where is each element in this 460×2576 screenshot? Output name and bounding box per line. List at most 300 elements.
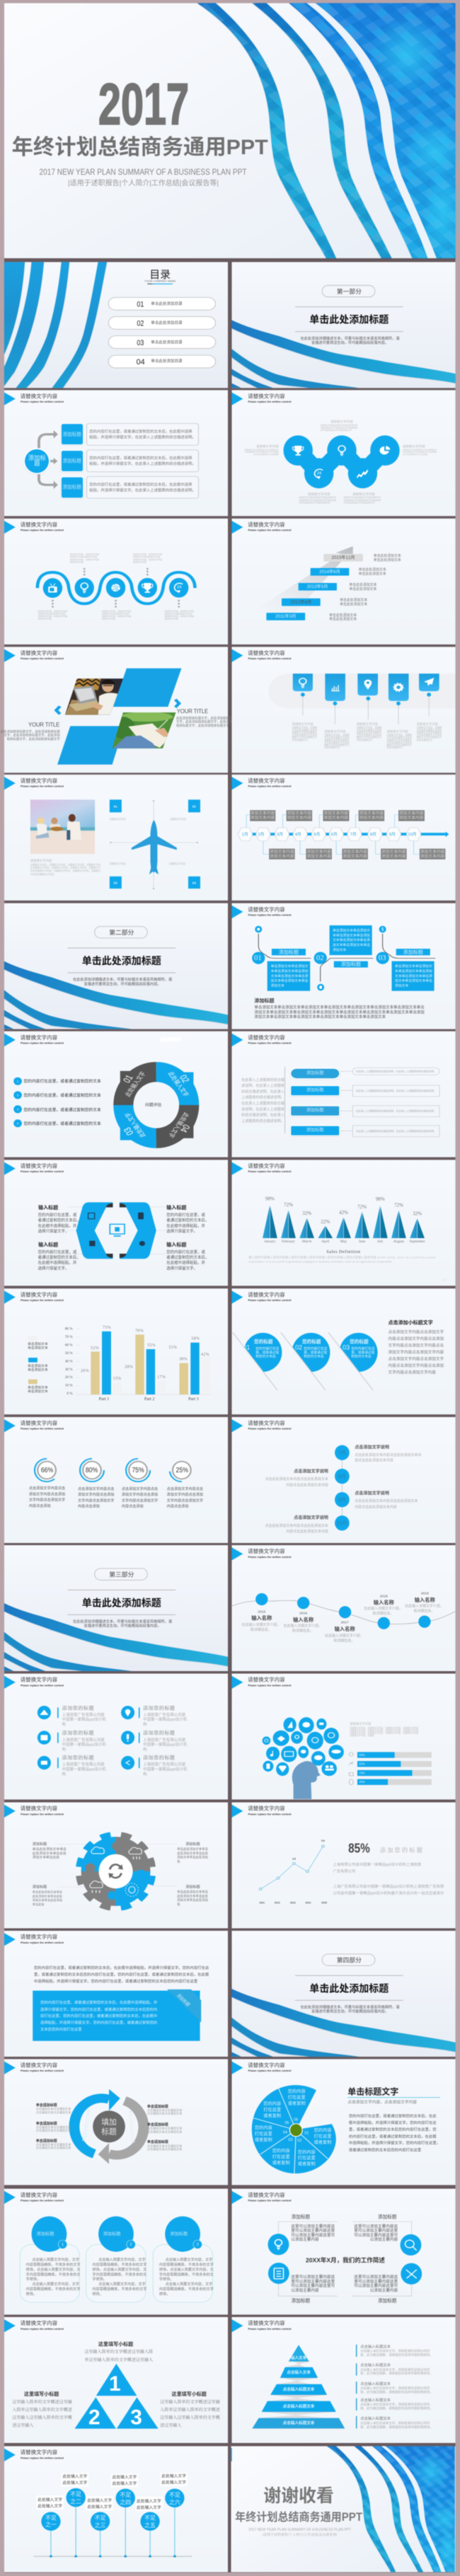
numbered circles: [252, 926, 389, 990]
bottom right text: 在此框中选择粘贴，并: [166, 1260, 205, 1266]
side text: 文字内容点击添加文字内容: [388, 1369, 436, 1375]
top text: 这里输入简单的文字概述这里输入简: [84, 2349, 153, 2355]
white note boxes: 此处输入文字: [87, 2504, 112, 2509]
card captions: 请替换文字内容，请替换: [357, 725, 382, 729]
bar labels: 75%: [103, 1326, 111, 1330]
right labels: 点击填加文本点击填加文本: [147, 2143, 182, 2147]
lower note boxes: 添加文本内容: [306, 849, 331, 855]
category labels: [99, 1397, 199, 1402]
header: Please replace the written content: [21, 1041, 64, 1044]
step 01 text box: 添加文本: [271, 983, 284, 988]
photo: writing on grass: [111, 712, 178, 749]
row 1: [61, 423, 198, 445]
bar labels: 38%: [179, 1357, 188, 1361]
progress bars: 75%: [359, 1771, 365, 1774]
card captions: 替换文字内容请替换文字: [386, 743, 412, 746]
right text: 入简单这里输入简单的文字概述: [160, 2407, 220, 2413]
card 3: 3: [197, 2243, 199, 2247]
card 3: 字内容需概括精炼，不用多余的文: [159, 2271, 214, 2277]
segmented ring: 03: [121, 1126, 136, 1137]
teardrop 01: 您的内容打在这: [255, 1346, 280, 1351]
blue buttons: 添加标题: [306, 1087, 324, 1093]
value labels: 98%: [265, 1196, 275, 1202]
timeline arrow: [238, 831, 449, 837]
curve and nodes: [232, 1593, 455, 1629]
sector numbers: 06: [294, 2118, 298, 2122]
header: 请替换文字内容: [21, 521, 58, 528]
card 1: 字内容需概括精炼，不用多余的文: [26, 2271, 81, 2277]
top left note: 添加文本单击此处: [33, 1855, 59, 1860]
step 03 text box: 本单击添加文本单击添加: [395, 969, 432, 974]
bottom captions: 请替换文字内容: [352, 492, 375, 497]
step 01 text box: [268, 961, 310, 991]
card 2: 2: [130, 2243, 132, 2247]
bottom left text: 输入标题: [38, 1241, 58, 1247]
lower note boxes: 添加文本内容: [381, 853, 406, 859]
chart caption: 输入您的内容输入您的内容输入您的内容输入您的内容输入您的内容输入您的内容输入您的内容 profit entity, such as a publicly-traded: [249, 1256, 435, 1259]
leader lines: [67, 1207, 166, 1254]
legend: 单击添加文本: [28, 1368, 48, 1373]
top text: [84, 2340, 153, 2363]
curved stripes: [4, 1603, 228, 1671]
header: [232, 1162, 292, 1175]
header: [4, 1290, 64, 1304]
month labels: [242, 832, 417, 837]
header: Please replace the written content: [21, 1813, 64, 1815]
sector numbers: 03: [288, 2138, 292, 2142]
header: 请替换文字内容: [248, 2319, 285, 2326]
left column text: 中国第一家精品ppt设计机: [62, 1742, 106, 1748]
baseline and stems: [33, 2506, 192, 2558]
top paragraphs: 以添加主要内容: [291, 2236, 319, 2242]
card captions: 请替换文字内容，请替换: [417, 725, 442, 729]
intro paragraph: 您的内容打在这里，或者通过复制您的文本后，在此框中选择粘贴，并选择只保留文字。您的内容打在这: [34, 1965, 209, 1970]
card 1: 修饰。点击输入简要文字内容，文: [26, 2266, 81, 2272]
date steps: 2013年5月: [307, 584, 328, 589]
pyramid shadows: [260, 2362, 335, 2418]
header: 请替换文字内容: [21, 1034, 58, 1041]
card captions: 请替换文字内容: [292, 722, 314, 727]
header: [4, 2191, 64, 2204]
left caption: [244, 444, 279, 456]
row 2: 粘贴，并选择只保留文字。在此录入上述图表的综合描述说明。: [89, 461, 196, 466]
bottom left note: 添加文本单击此处添加: [33, 1898, 62, 1902]
right caption: 内容请替换文字内容请替换文字内容请替换: [403, 451, 437, 454]
lower note boxes: 添加文本内容: [420, 853, 445, 859]
right column text: 构: [143, 1771, 147, 1777]
sector texts: 您的内容: [288, 2089, 306, 2094]
card 2: 点击输入简要文字内容，文字: [98, 2281, 146, 2287]
numbered squares: 04: [192, 881, 196, 884]
sector texts: 或者复制: [255, 2137, 272, 2142]
photo: man with laptop: [64, 678, 123, 715]
right arrow chevron: [176, 700, 179, 707]
captions: 请替换文字内容，请替换文字内容: [69, 558, 99, 561]
top right note: 处: [177, 1859, 180, 1864]
right text: 述这里输入: [160, 2422, 181, 2428]
left paragraph: 上述图表的综合描述说明。: [241, 1095, 284, 1100]
progress bars: [349, 1752, 432, 1785]
header: Please replace the written content: [248, 1684, 292, 1687]
header: [4, 1676, 64, 1689]
August note: 点击此处添加文本内容点击此处添加文本: [265, 1477, 328, 1482]
footer text: 添加文本单击添加文本单击添加文本单击添加文本单击添加文本单击添加文本: [254, 1014, 386, 1020]
right text block: YOUR TITLE: [177, 708, 208, 715]
white note boxes: 此处输入文字: [87, 2497, 112, 2503]
step notes: 单击此处添加文本: [329, 617, 357, 622]
top left text: 者通过复制您的文本后，: [38, 1217, 81, 1223]
card 1: 内容需概括精炼，不用多余的文字: [26, 2262, 81, 2268]
upper note boxes: 添加文本内容: [251, 810, 275, 816]
2018 item: 2018: [380, 1595, 388, 1599]
row 2: 您的内容打在这里，或者通过复制您的文本后，在此框中选择: [89, 455, 192, 461]
card captions: 请替换文字内容: [357, 722, 379, 727]
quadrant labels: [109, 817, 187, 865]
2016 item: 和详细信息。: [292, 1629, 314, 1634]
left paragraph: 在此录入上述图表的综合描: [241, 1101, 284, 1106]
chart labels: [259, 1839, 327, 1904]
photo caption: 容请替换文字内容。请替换文字内容，请替换文字内容，请替换文字: [30, 866, 101, 870]
right labels: 点击填加文本点击填加文本: [147, 2111, 182, 2115]
card 1: 添加标题: [37, 2231, 54, 2236]
tree caption: [350, 1721, 418, 1737]
tier labels: 点击输入标题文本: [283, 2403, 315, 2409]
ring captions: 添加文字内容点击添加: [78, 1491, 114, 1497]
right column text: 中国第一家精品ppt设计机: [143, 1742, 188, 1748]
contents item 02: [108, 317, 216, 329]
card 1: 点击输入简要文字内容，文字: [32, 2257, 79, 2263]
card 2: 字内容需概括精炼，不用多余的文: [92, 2271, 146, 2277]
month circles: [335, 1445, 350, 1530]
card 1: 修饰。: [26, 2291, 37, 2297]
bar labels: [81, 1326, 209, 1381]
card 1: 点击输入简要文字内容，文字: [32, 2281, 79, 2287]
slide: six icon items: [4, 1674, 228, 1800]
top text: 单这里输入简单的文字概述这里输入: [84, 2357, 153, 2363]
header: 请替换文字内容: [248, 393, 285, 400]
teardrop 03: 03: [343, 1344, 350, 1351]
section title with rules: 单击此处添加标题: [309, 314, 389, 325]
pin circles: 不足: [45, 2515, 57, 2522]
item notes: 点击输入本栏的具体文字，简明扼要的说明分项内: [360, 2402, 430, 2407]
top right note: 单击此处添加文本单击: [177, 1847, 209, 1852]
y axis: 10 %: [65, 1384, 73, 1388]
month labels: 7月: [350, 832, 357, 837]
side text: 内容点击添加文字内容点击添加: [388, 1363, 444, 1368]
block titles: 添加标题: [292, 2297, 311, 2304]
header: [4, 2319, 64, 2332]
July note: 点击此处添加文本内容点击此处添加文本内: [355, 1452, 422, 1457]
card captions: 文字内容请替换文字内容: [357, 728, 382, 732]
chart caption: Sales Definition: [326, 1249, 361, 1254]
slide: three teardrops: [232, 1288, 456, 1414]
right caption: 文字内容请替换文字内容请替换: [403, 453, 428, 456]
footer text: 单击添加文本单击添加文本单击添加文本单击添加文本单击添加文本单击添加文本单击添加文本单击: [254, 1005, 425, 1010]
pin circles: 不足: [95, 2515, 106, 2522]
outlined notes: 在此录入上述图表的综合描述说明。在此录入上述图表的综合描述说明。: [356, 1109, 437, 1113]
section title with rules: 单击此处添加标题: [82, 955, 161, 966]
airplane: [132, 820, 177, 874]
left text: 这里输入这里输入简单的文字概: [12, 2415, 72, 2420]
top left text: 选择只保留文字。: [38, 1228, 69, 1234]
bottom paragraphs: 里可以添加主要内容这里: [354, 2279, 398, 2285]
block titles: 添加标题: [292, 2213, 311, 2219]
left paragraph: [241, 1078, 284, 1124]
teardrop 01: [233, 1332, 282, 1390]
header: [232, 2319, 292, 2332]
grey branch arrows: [39, 430, 58, 489]
right column text: [143, 1704, 188, 1777]
part label pill: 第二部分: [109, 928, 134, 936]
card 3: 字修饰。: [159, 2276, 173, 2282]
panel text: 容打在这里，您的内容打在这里，或者通过复制您的文本后，在此框中: [40, 2013, 157, 2018]
ring captions: 文字内容点击添加文字: [167, 1497, 203, 1503]
photo caption: 内容请替换文字内容。请替换文字内容，请替换文字内容，请替换文: [30, 869, 101, 872]
2018 item: 输入名称: [374, 1600, 395, 1606]
numbered list: 3: [17, 1108, 19, 1111]
side text: 文字内容点击添加文字内容点击: [388, 1342, 444, 1348]
upper note boxes: 添加文本内容: [359, 810, 384, 816]
white note boxes: 此处输入文字: [161, 2473, 186, 2478]
bar labels: 52%: [91, 1346, 99, 1351]
connector lines: [246, 815, 420, 854]
header: Please replace the written content: [248, 2199, 292, 2202]
grey cycle arrow: 单击此处填加文字内容: [127, 2110, 137, 2144]
sector texts: 或者复制: [263, 2113, 281, 2118]
contents item 04: [108, 355, 216, 368]
step notes: 单击此处添加文本: [340, 601, 367, 606]
2019 item: 在此输入详细文字介绍，: [405, 1603, 444, 1608]
slide: five pin cards: [232, 647, 456, 773]
value labels: 22%: [321, 1219, 330, 1225]
curved stripes: [232, 1989, 455, 2057]
header: Please replace the written content: [21, 1941, 64, 1944]
month axis labels: August: [393, 1240, 404, 1244]
block titles: 添加标题: [378, 2213, 397, 2219]
top right note: 添加标题: [185, 1842, 200, 1847]
segmented ring: 问题评估: [145, 1102, 161, 1108]
segmented ring: 此处输入文字: [167, 1111, 191, 1139]
title tags: 添加标题: [341, 961, 361, 967]
right labels: 点击填加文本点击填加文本: [147, 2126, 182, 2130]
right paragraph: 框中选择粘贴，并选择只保留文字。您的内容打在这: [349, 2120, 437, 2125]
bottom paragraphs: [291, 2274, 398, 2293]
right column text: 上海锐普广告有限公司是: [143, 1711, 186, 1717]
bottom captions: 内容请替换文字内容请替换文字内容请替换: [299, 499, 336, 502]
bottom captions: [299, 492, 381, 504]
right paragraph: 中选择粘贴，并选择只保留文字。您的内容打在这里，: [349, 2140, 440, 2146]
numbered list: 2: [17, 1094, 19, 1097]
item notes: 容，此为概念图解，请根据您的具体内容酌情修改。: [360, 2352, 433, 2357]
right paragraph: 的内容打在这里，或者通过复制您的文本后，在此框: [349, 2133, 437, 2139]
section title with rules: 单击此处添加标题: [82, 1597, 161, 1608]
chart labels: 3.8: [292, 1858, 296, 1861]
numbered circles: 02: [316, 954, 324, 962]
step notes: 单击此处添加文本: [340, 598, 367, 603]
card 3: [153, 2217, 214, 2302]
sector texts: 您的内容: [255, 2125, 272, 2130]
top left text: 输入标题: [38, 1204, 58, 1211]
white note boxes: 此处输入文字: [161, 2479, 186, 2485]
right title: 点击添加文字内容，点击添加文字内容: [347, 2099, 417, 2105]
pin circles: 不足: [70, 2491, 81, 2497]
pin circles: [41, 2488, 185, 2531]
sector texts: 或者复制: [288, 2101, 306, 2106]
slide: part one divider: [232, 262, 456, 388]
header: Please replace the written content: [21, 2456, 64, 2459]
center disc: 填加: [101, 2118, 117, 2127]
slide: thank you: [231, 2446, 459, 2572]
right labels: 单击填加标题: [147, 2139, 168, 2144]
left text: 这里输入简单的文字概述这里输: [12, 2399, 72, 2405]
left column text: 构: [62, 1721, 67, 1727]
right labels: 点击填加文本点击填加文本: [147, 2108, 182, 2112]
part label pill: [95, 1569, 147, 1580]
teardrop 03: 您的内容打在这: [351, 1346, 375, 1351]
card 2: 字修饰。: [92, 2276, 107, 2282]
curved stripes: [4, 961, 228, 1029]
side text: 点击添加文字内容点击添加文字: [388, 1356, 444, 1361]
side text: 添加文字内容点击添加文字内容: [388, 1349, 444, 1355]
pin circles: 之一: [45, 2521, 57, 2528]
right column text: 上海锐普广告有限公司是: [143, 1737, 186, 1743]
contents item 02: 02: [137, 320, 144, 328]
left text block: [1, 722, 60, 741]
date steps: 2011年3月: [275, 613, 296, 619]
sector texts: 或者复制: [272, 2160, 290, 2166]
2017 item: 和详细信息。: [333, 1638, 355, 1643]
header: Please replace the written content: [21, 400, 64, 403]
header: 请替换文字内容: [21, 1676, 58, 1683]
top paragraphs: 里可以添加主要内容这里: [354, 2228, 398, 2234]
header: [4, 649, 64, 662]
sector numbers: 02: [297, 2139, 301, 2143]
month circles: 7月: [338, 1450, 346, 1456]
icon circles: [268, 2234, 422, 2285]
chart heading: 添加您的标题: [380, 1847, 424, 1854]
right paragraph: [349, 2113, 440, 2152]
left labels: 单击填加标题: [36, 2103, 57, 2108]
2018 item: 和详细信息。: [373, 1611, 393, 1616]
part label pill: [322, 285, 375, 297]
October note: 内容点击此处添加文本内容: [286, 1529, 328, 1534]
right text: [160, 2391, 220, 2428]
75 percent ring: 75%: [132, 1467, 144, 1474]
2018 item: [364, 1595, 403, 1616]
footer text: 添加文本单击添加文本单击添加文本单击添加文本单击添加文本单击添加文本单击添加文本单击添加: [254, 1010, 425, 1015]
outlined notes: 在此录入上述图表的综合描述说明。在此录入上述图表的综合描述说明。: [356, 1129, 437, 1133]
top right text: 输入标题: [166, 1204, 186, 1211]
right paragraph: 或者通过复制您的文本后您的内容打在这里: [349, 2147, 422, 2152]
slide: part three divider: [4, 1545, 228, 1671]
curved stripes: [232, 320, 455, 388]
icon circles: [43, 578, 188, 598]
left column text: 添加您的标题: [62, 1730, 94, 1736]
header: 请替换文字内容: [248, 1419, 285, 1426]
card captions: 请替换文字内容: [386, 729, 408, 734]
white note boxes: 此处输入文字: [113, 2480, 137, 2486]
upper note boxes: 添加文本内容: [251, 815, 275, 821]
lower note boxes: 添加文本内容: [343, 849, 367, 855]
pie sectors: [252, 2085, 336, 2174]
header: Please replace the written content: [248, 1556, 292, 1559]
bar labels: 15%: [113, 1377, 122, 1381]
top right text: 您的内容打在这里，或: [166, 1212, 205, 1218]
top right text: 者通过复制您的文本后，: [166, 1217, 209, 1223]
bottom left note: 单击此处添加文本单击: [33, 1890, 62, 1895]
step 03 text box: [391, 961, 435, 991]
month circles: 10月: [337, 1520, 347, 1526]
tree caption: 请替换文字内容，请替换文字内容，请替换文字内容，请替换文字内容: [350, 1731, 418, 1735]
bottom left note: 单击此处: [33, 1902, 45, 1907]
header: [232, 906, 292, 918]
slide: part four divider: [232, 1931, 456, 2057]
step 01 text box: 加文本单击添加文本单击: [271, 978, 309, 983]
slide: ring of four segments: [4, 1032, 228, 1157]
2017 item: 在此输入详细文字介绍，: [325, 1633, 364, 1638]
slide: monthly timeline: [232, 775, 456, 901]
row 1: 您的内容打在这里，或者通过复制您的文本后，在此框中选择: [89, 429, 192, 434]
header: 请替换文字内容: [248, 1805, 285, 1812]
left labels: 点击填加文本点击填加文本: [36, 2142, 71, 2147]
25 percent ring: 25%: [176, 1467, 188, 1474]
slide: cycle arrows: [4, 2059, 228, 2185]
card icons: [299, 678, 434, 691]
left text block: 文字，此处添加相关标题文字，此处添加: [4, 733, 60, 738]
panel text: 您的内容打在这里，或者通过复制您的文本后，在此框中选择粘贴，并: [40, 1999, 158, 2005]
top left note: [33, 1842, 67, 1860]
sector texts: 或者复制: [298, 2161, 316, 2167]
ring captions: 内容点击添加: [29, 1503, 51, 1508]
July note: [355, 1445, 422, 1462]
captions: 请替换文字内容，请替换文字内容: [133, 553, 162, 556]
chart labels: 2012: [275, 1901, 280, 1904]
weather icons: [90, 1847, 142, 1896]
bottom right note: 单击此处添加文本单击: [177, 1890, 209, 1895]
contents item 02: 单击此处添加目录: [151, 320, 183, 325]
step 02 text box: 单击添加文本单击添加文: [333, 928, 370, 932]
section description: [73, 976, 172, 986]
item notes: 容，此为概念图解，请根据您的具体内容酌情修改。: [360, 2425, 433, 2430]
row 3: 您的内容打在这里，或者通过复制您的文本后，在此框中选择: [89, 482, 192, 487]
August note: [265, 1468, 328, 1487]
card captions: 字内容请替换文字内容请: [386, 740, 413, 744]
upper note boxes: [250, 810, 425, 821]
sector numbers: 01: [304, 2131, 309, 2135]
numbered list: 您的内容打在这里，或者通过复制您的文本: [23, 1078, 101, 1084]
upper note boxes: 添加文本内容: [399, 810, 424, 816]
card captions: 请替换文字内容，请替换: [386, 733, 413, 737]
header: Please replace the written content: [21, 2328, 64, 2330]
outlined notes: [352, 1068, 439, 1137]
section title with rules: 单击此处添加标题: [309, 1982, 389, 1994]
header: [4, 2062, 64, 2074]
teardrop 03: 您的标题: [350, 1338, 369, 1344]
bottom left text: 选择只保留文字。: [38, 1265, 69, 1271]
progress bars: 60%: [359, 1753, 365, 1757]
step 03 text box: 添加文本: [395, 983, 408, 988]
left labels: [36, 2103, 71, 2149]
slide: four corner icons: [232, 2189, 456, 2315]
thanks usage note: |适用于述职报告|个人简介|工作总结|会议报告等|: [263, 2532, 338, 2537]
title tags: 添加标题: [279, 949, 299, 955]
top paragraphs: 可以添加主要内容这里可: [354, 2232, 398, 2238]
bars: [91, 1332, 210, 1394]
header: [232, 1805, 292, 1818]
section description: 在此处添加详细描述文本，尽量与标题文本语言风格相符，语: [73, 1619, 172, 1624]
header: 请替换文字内容: [248, 521, 285, 528]
header: 请替换文字内容: [21, 2062, 58, 2069]
